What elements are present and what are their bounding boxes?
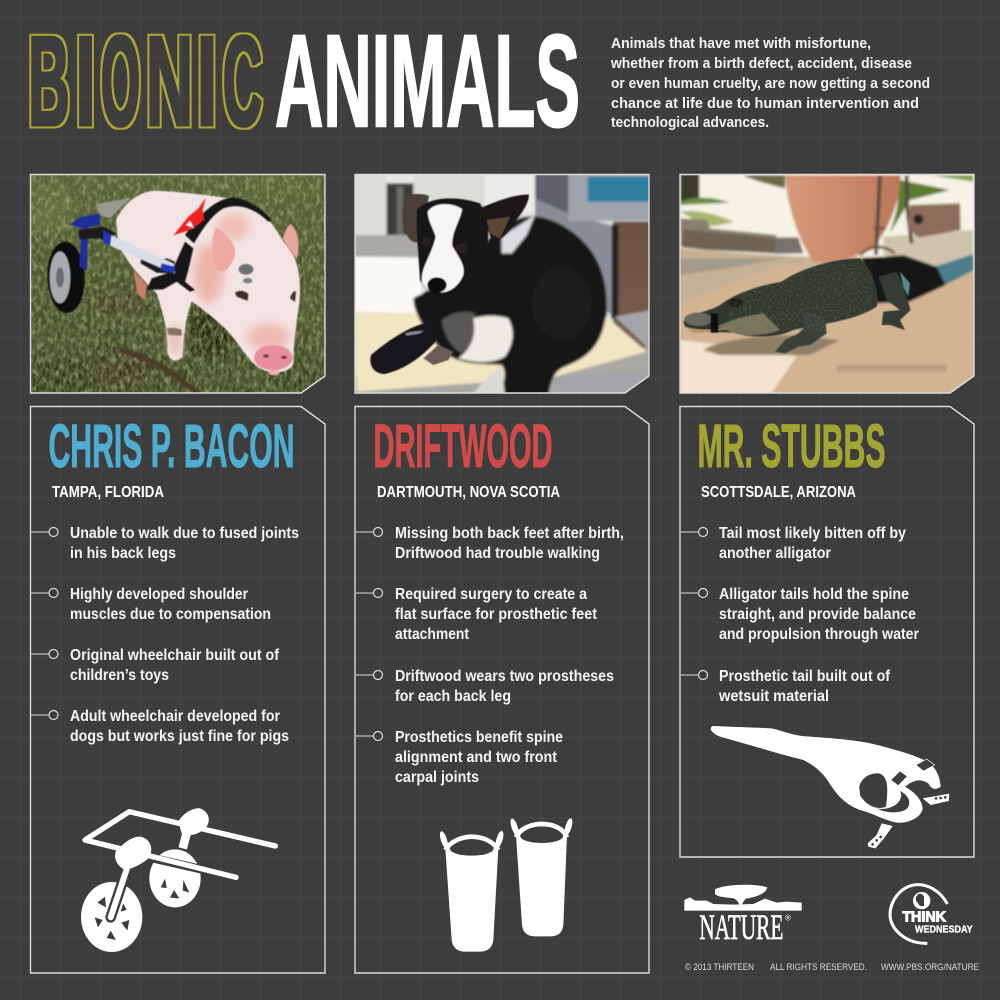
title <box>28 7 580 154</box>
panel: Driftwood <box>355 406 649 973</box>
flagstone <box>690 264 957 305</box>
intro text: or even human cruelty, are now getting a second <box>611 76 930 92</box>
red flag <box>173 198 206 235</box>
location: SCOTTSDALE, ARIZONA <box>701 484 856 501</box>
fact 2: Required surgery to create a <box>395 586 587 603</box>
prosthetic <box>370 323 437 374</box>
footer: ALL RIGHTS RESERVED. <box>770 962 867 973</box>
fact 4: Adult wheelchair developed for <box>70 708 280 725</box>
harness <box>185 197 272 243</box>
panel: Chris P. Bacon <box>30 406 325 973</box>
footer: WWW.PBS.ORG/NATURE <box>881 962 979 973</box>
mat <box>355 312 647 392</box>
fact 2 <box>681 586 919 643</box>
fact 2: straight, and provide balance <box>719 606 916 623</box>
fact 2: muscles due to compensation <box>70 606 271 623</box>
fact 1: in his back legs <box>70 545 176 562</box>
pillow <box>353 257 425 317</box>
photo: dog with prosthetic legs <box>353 170 653 403</box>
title word: bionic: B <box>28 10 70 154</box>
fact 1: another alligator <box>719 545 831 562</box>
panel: Chris P. Bacon: CHRIS P. BACON <box>48 412 294 480</box>
fact 3: Original wheelchair built out of <box>70 647 280 664</box>
fact 2 <box>356 586 597 643</box>
intro text: Animals that have met with misfortune, <box>611 36 871 52</box>
dog blaze and muzzle <box>422 204 464 293</box>
blue frame <box>68 213 100 270</box>
title word: bionic <box>28 10 262 154</box>
fact 4 <box>356 729 563 786</box>
fact 3: children’s toys <box>70 667 169 684</box>
pig face <box>239 264 253 275</box>
iron stand <box>876 175 912 255</box>
terracotta pot <box>785 175 901 262</box>
fact 2: flat surface for prosthetic feet <box>395 606 597 623</box>
fact 4: dogs but works just fine for pigs <box>70 728 289 745</box>
paving <box>678 248 810 303</box>
fact 1: Tail most likely bitten off by <box>719 525 906 542</box>
logo: Think Wednesday: WEDNESDAY <box>915 924 973 935</box>
title word: bionic: N <box>146 10 193 154</box>
dog ears <box>403 194 429 242</box>
footer: © 2013 THIRTEEN <box>685 962 754 973</box>
intro text <box>610 36 930 131</box>
fact 3: Driftwood wears two prostheses <box>395 668 614 685</box>
logo: Nature <box>684 885 802 947</box>
dog ruff <box>502 215 535 253</box>
fact 4: alignment and two front <box>395 749 557 766</box>
icon: wheelchair <box>81 808 275 952</box>
photo frame: pig <box>30 174 325 393</box>
fact 1 <box>31 525 299 562</box>
logo: Nature: NATURE <box>699 907 783 947</box>
intro text: technological advances. <box>611 115 769 131</box>
fact 4: carpal joints <box>395 769 479 786</box>
logo: Think Wednesday <box>890 885 973 943</box>
panel: Driftwood: DRIFTWOOD <box>374 412 552 480</box>
fact 4: Prosthetics benefit spine <box>395 729 563 746</box>
fact 2 <box>31 586 271 623</box>
curb stones <box>680 217 778 248</box>
fact 2: Highly developed shoulder <box>70 586 248 603</box>
dog chest <box>442 312 476 353</box>
fact 1 <box>681 525 906 562</box>
photo: alligator with prosthetic tail <box>678 170 978 403</box>
fact 1: Missing both back feet after birth, <box>395 525 624 542</box>
intro text: whether from a birth defect, accident, disease <box>610 56 912 72</box>
fact 1 <box>356 525 624 562</box>
fact 1: Unable to walk due to fused joints <box>70 525 299 542</box>
pig body <box>116 191 300 372</box>
fact 3 <box>356 668 614 705</box>
alligator body <box>683 258 878 337</box>
intro text: chance at life due to human intervention and <box>611 96 919 112</box>
photo frame: alligator <box>680 174 974 393</box>
brick <box>907 203 961 238</box>
pig hind leg <box>133 270 147 301</box>
wheel <box>46 241 86 314</box>
alligator front legs <box>775 310 827 353</box>
icon: prosthetic tail <box>711 726 949 848</box>
fact 3 <box>31 647 280 684</box>
photo frame: dog <box>355 174 649 393</box>
title word: animals: ANIMALS <box>275 7 580 154</box>
title word: bionic: O <box>101 10 140 154</box>
footer <box>685 962 979 973</box>
title word: bionic: I <box>75 10 96 154</box>
photo: pig in wheelchair <box>31 175 324 392</box>
pig ears <box>212 227 235 271</box>
fact 3: wetsuit material <box>718 688 829 705</box>
wheelchair back platform <box>96 198 130 218</box>
fact 3: for each back leg <box>395 688 511 705</box>
logo: Think Wednesday: THINK <box>902 910 946 926</box>
fact 2: attachment <box>395 626 469 643</box>
fact 3 <box>681 668 891 705</box>
sunny yard <box>678 170 977 257</box>
dog body <box>413 216 607 397</box>
icon: prosthetic cups <box>440 818 572 952</box>
fact 2: Alligator tails hold the spine <box>719 586 909 603</box>
panel: Mr. Stubbs <box>680 406 974 857</box>
location: DARTMOUTH, NOVA SCOTIA <box>377 484 560 501</box>
fact 4 <box>31 708 289 745</box>
alligator tail and wetsuit <box>935 254 973 285</box>
title word: bionic: I <box>196 10 218 154</box>
fact 2: and propulsion through water <box>719 626 919 643</box>
dog head <box>416 198 488 294</box>
logo: Nature: ® <box>785 914 791 923</box>
title: C <box>223 10 262 154</box>
fact 3: Prosthetic tail built out of <box>719 668 891 685</box>
location: TAMPA, FLORIDA <box>52 484 164 501</box>
fact 1: Driftwood had trouble walking <box>395 545 600 562</box>
